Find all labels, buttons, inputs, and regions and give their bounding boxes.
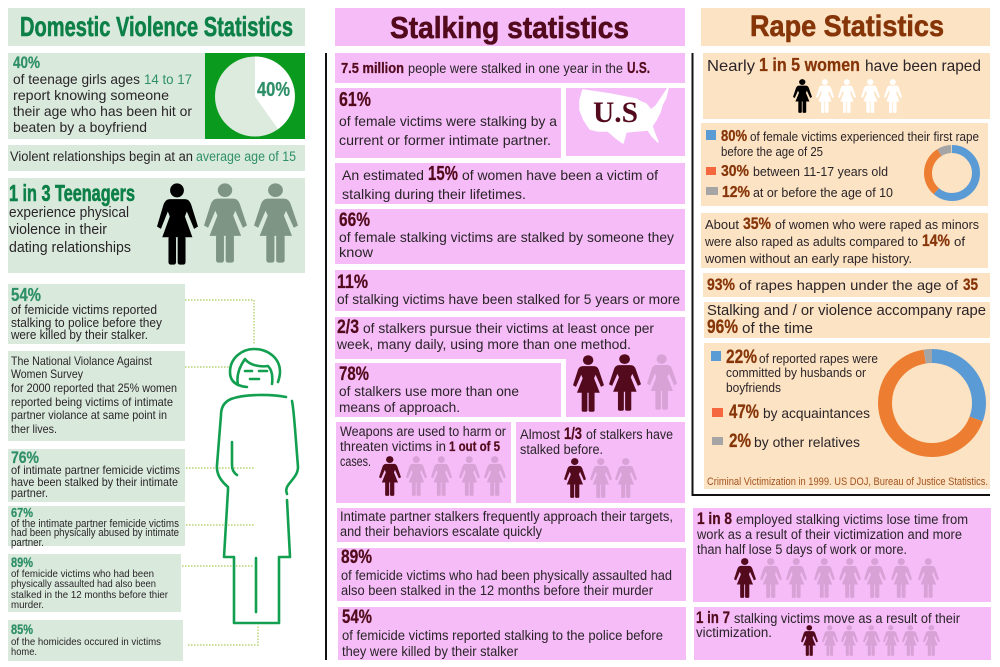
- panel: 35 percent minors: of: [954, 234, 965, 249]
- divider: left rule of stalking column: [325, 53, 327, 660]
- legend: 47 percent: [712, 402, 870, 423]
- panel: 1 in 3 teenagers: dating relationships: [9, 240, 131, 256]
- panel: 93 percent under 35: 93%: [707, 275, 735, 294]
- legend: 30 percent: [706, 163, 888, 180]
- legend: 30 percent: between 11-17 years old: [753, 165, 888, 179]
- panel: 89 percent assaulted: [337, 547, 686, 601]
- panel: 35 percent minors: women without an early rape history.: [704, 251, 912, 266]
- panel: violent relationships average age: Violent relationships begin at an: [10, 149, 193, 164]
- panel: 85 percent: 85%: [11, 621, 33, 637]
- panel: violent relationships average age: average age of 15: [196, 149, 296, 164]
- panel: 67 percent: had been physically abused by intimate: [11, 527, 179, 539]
- panel: 54 percent femicide victims: 54%: [11, 285, 41, 305]
- panel: 40 percent of teenage girls: 14 to 17: [144, 71, 192, 87]
- panel: weapons 1 out of 5: cases.: [340, 454, 371, 469]
- panel: 54 percent reported stalking: of femicide victims reported stalking to the police before: [342, 627, 663, 643]
- panel: 1 in 7 move: 1 in 7: [696, 608, 730, 627]
- panel: domestic violence title: [8, 8, 305, 46]
- panel: 76 percent: have been stalked by their intimate: [11, 475, 178, 489]
- chart: 40 percent pie: [205, 53, 305, 139]
- panel: 1 in 3 teenagers: [8, 178, 305, 273]
- panel: 54 percent reported stalking: they were killed by their stalker: [342, 643, 518, 659]
- panel: stalking and violence 96 percent: Stalking and / or violence accompany rape: [707, 302, 986, 319]
- panel: national survey: partner violance at same point in: [11, 408, 167, 422]
- panel: almost 1/3 of stalkers: Almost: [520, 427, 560, 442]
- panel: 54 percent reported stalking: 54%: [342, 607, 372, 628]
- panel: 35 percent minors: 35%: [743, 214, 771, 233]
- panel: 1 in 8 employed victims: work as a result of their victimization and more: [696, 527, 962, 542]
- panel: 7.5 million: 7.5 million: [341, 60, 404, 77]
- icon: five women, one highlighted: [793, 79, 902, 113]
- panel: 78 percent: of stalkers use more than one: [339, 383, 519, 399]
- legend: 22 percent: of reported rapes were: [759, 351, 878, 366]
- panel: 1 in 3 teenagers: violence in their: [9, 222, 107, 238]
- panel: intimate partner stalkers: and their behaviors escalate quickly: [340, 524, 542, 539]
- icon: US map: [566, 88, 685, 156]
- panel: almost 1/3 of stalkers: of stalkers have: [586, 427, 673, 442]
- chart: 40 percent pie: 40%: [257, 79, 290, 101]
- panel: 67 percent: of the intimate partner femicide victims: [11, 518, 179, 530]
- icon: three women, one highlighted: [157, 183, 298, 265]
- panel: 40 percent of teenage girls: 40%: [13, 53, 40, 72]
- icon: three women, one highlighted: [564, 458, 637, 498]
- legend: 22 percent: [711, 347, 878, 395]
- panel: 2/3 of stalkers: 2/3: [337, 317, 359, 338]
- panel: 1 in 7 move: [694, 607, 991, 660]
- panel: 89 percent: physically assaulted had also been: [11, 578, 156, 590]
- panel: 54 percent reported stalking: [338, 607, 686, 660]
- panel: rape title: Rape Statistics: [750, 10, 944, 43]
- panel: 35 percent minors: [701, 213, 988, 268]
- panel: 11 percent: of stalking victims have been stalked for 5 years or more: [337, 291, 680, 307]
- panel: 93 percent under 35: [703, 273, 990, 297]
- panel: national survey: ther lives.: [11, 422, 57, 436]
- legend: 80 percent: of female victims experienced their first rape: [750, 130, 979, 144]
- panel: 11 percent: [335, 270, 685, 311]
- panel: 54 percent femicide victims: [8, 284, 185, 344]
- panel: 89 percent: murder.: [11, 599, 44, 611]
- panel: 66 percent: know: [339, 244, 374, 260]
- panel: intimate partner stalkers: Intimate partner stalkers frequently approach their targets,: [340, 509, 673, 524]
- panel: 76 percent: 76%: [11, 448, 39, 467]
- chart: large donut: [885, 356, 979, 450]
- panel: 76 percent: of intimate partner femicide victims: [11, 463, 180, 477]
- icon: seven women, one highlighted: [801, 625, 940, 656]
- leader lines from panels to the figure: [182, 300, 258, 645]
- panel: nearly 1 in 5 women: 1 in 5 women: [759, 55, 860, 75]
- panel: 89 percent assaulted: of femicide victims who had been physically assaulted had: [341, 567, 672, 583]
- panel: 76 percent: partner.: [11, 486, 48, 500]
- panel: 66 percent: of female stalking victims are stalked by someone they: [339, 229, 674, 245]
- panel: nearly 1 in 5 women: [703, 53, 990, 119]
- icon: three women, two highlighted: [566, 354, 685, 417]
- panel: 66 percent: 66%: [339, 210, 370, 231]
- panel: 1 in 8 employed victims: employed stalking victims lose time from: [736, 512, 968, 527]
- panel: 78 percent: means of approach.: [339, 399, 460, 415]
- panel: 89 percent assaulted: 89%: [341, 547, 372, 568]
- panel: 2/3 of stalkers: [335, 317, 685, 359]
- panel: 89 percent assaulted: also been stalked in the 12 months before their murder: [341, 582, 653, 598]
- legend: 80 percent: before the age of 25: [721, 145, 823, 159]
- icon: US map: U.S: [593, 96, 638, 129]
- panel: weapons 1 out of 5: Weapons are used to harm or: [340, 424, 506, 439]
- panel: national survey: Women Survey: [11, 367, 83, 381]
- panel: 7.5 million: people were stalked in one year in the: [408, 61, 623, 76]
- panel: 1 in 7 move: victimization.: [696, 625, 772, 640]
- panel: 35 percent minors: of women who were raped as minors: [775, 217, 979, 232]
- panel: 15 percent: stalking during their lifetimes.: [342, 186, 526, 202]
- panel: 61 percent: of female victims were stalking by a: [339, 113, 557, 129]
- legend: 12 percent: at or before the age of 10: [753, 186, 893, 200]
- panel: who commits rape with donut: [704, 343, 990, 489]
- legend: 12 percent: 12%: [722, 184, 750, 201]
- panel: 67 percent: partner.: [11, 537, 44, 549]
- panel: 61 percent: current or former intimate partner.: [339, 132, 551, 148]
- legend: 30 percent: 30%: [721, 163, 749, 180]
- legend: 47 percent: 47%: [729, 402, 759, 423]
- panel: 1 in 3 teenagers: 1 in 3 Teenagers: [9, 180, 135, 206]
- panel: domestic violence title: Domestic Violence Statistics: [20, 11, 293, 42]
- panel: stalking and violence 96 percent: [704, 302, 990, 338]
- panel: 54 percent femicide victims: stalking to police before they: [11, 316, 163, 330]
- panel: 89 percent: [8, 554, 181, 612]
- panel: 89 percent: 89%: [11, 554, 33, 570]
- icon: five women, one highlighted: [379, 456, 506, 496]
- panel: 35 percent minors: were also raped as adults compared to: [704, 234, 918, 249]
- panel: 40 percent of teenage girls: [8, 53, 205, 139]
- panel: rape title: [701, 8, 990, 46]
- panel: stalking and violence 96 percent: of the time: [742, 320, 813, 337]
- panel: 66 percent: [335, 209, 685, 264]
- icon: green outline woman figure: [217, 349, 298, 623]
- legend: 2 percent: [712, 431, 860, 452]
- panel: 1 in 7 move: stalking victims move as a result of their: [734, 611, 960, 626]
- panel: 15 percent: of women have been a victim of: [462, 167, 658, 183]
- panel: stalking title: Stalking statistics: [390, 10, 629, 45]
- panel: stalking and violence 96 percent: 96%: [707, 317, 738, 338]
- panel: 89 percent: stalked in the 12 months before thier: [11, 589, 168, 601]
- panel: 85 percent: home.: [11, 646, 37, 658]
- legend: 2 percent: by other relatives: [754, 434, 860, 450]
- panel: 15 percent: [335, 163, 685, 204]
- panel: 7.5 million: [335, 53, 685, 83]
- legend: 80 percent: 80%: [721, 128, 747, 145]
- panel: 2/3 of stalkers: of stalkers pursue their victims at least once per: [363, 320, 654, 336]
- panel: 85 percent: of the homicides occured in victims: [11, 636, 161, 648]
- legend: 22 percent: boyfriends: [726, 380, 781, 395]
- panel: 35 percent minors: 14%: [922, 231, 950, 250]
- panel: 85 percent: [8, 620, 183, 661]
- chart: small donut: [928, 149, 976, 197]
- frame: rape column rule: [692, 53, 990, 495]
- panel: 61 percent: [335, 88, 561, 158]
- panel: 1 in 8 employed victims: than half lose 5 days of work or more.: [697, 542, 907, 557]
- panel: 15 percent: An estimated: [342, 167, 424, 183]
- panel: almost 1/3 of stalkers: [516, 422, 685, 503]
- panel: nearly 1 in 5 women: have been raped: [865, 58, 981, 75]
- panel: 61 percent: 61%: [339, 89, 371, 111]
- panel: 78 percent: 78%: [339, 364, 369, 385]
- panel: 67 percent: 67%: [11, 505, 33, 520]
- panel: 35 percent minors: About: [705, 217, 739, 232]
- panel: weapons 1 out of 5: [336, 422, 511, 503]
- legend: 22 percent: 22%: [726, 347, 757, 368]
- panel: almost 1/3 of stalkers: 1/3: [564, 424, 582, 443]
- panel: 93 percent under 35: 35: [963, 275, 978, 294]
- panel: nearly 1 in 5 women: Nearly: [707, 58, 755, 75]
- panel: 7.5 million: U.S.: [627, 60, 650, 77]
- legend: 2 percent: 2%: [729, 431, 751, 452]
- panel: violent relationships average age: [8, 145, 305, 171]
- panel: 78 percent: [335, 363, 561, 417]
- panel: national survey: The National Violance Against: [11, 354, 153, 368]
- panel: 93 percent under 35: of rapes happen under the age of: [739, 277, 958, 293]
- panel: 1 in 8 employed victims: [693, 508, 991, 602]
- panel: national survey: [8, 351, 185, 441]
- panel: 40 percent of teenage girls: beaten by a boyfriend: [13, 119, 147, 135]
- panel: 1 in 8 employed victims: 1 in 8: [697, 509, 732, 528]
- panel: 11 percent: 11%: [337, 272, 368, 293]
- panel: 40 percent of teenage girls: their age who has been hit or: [13, 103, 192, 119]
- panel: weapons 1 out of 5: 1 out of 5: [449, 438, 500, 454]
- legend: 12 percent: [706, 184, 893, 201]
- panel: 40 percent of teenage girls: report knowing someone: [13, 87, 169, 103]
- panel: 15 percent: 15%: [428, 163, 458, 185]
- icon: eight women, one highlighted: [734, 558, 939, 598]
- panel: almost 1/3 of stalkers: stalked before.: [520, 442, 603, 457]
- legend: 80 percent: [706, 128, 979, 159]
- panel: 67 percent: [8, 505, 185, 549]
- panel: 40 percent of teenage girls: of teenage girls ages: [13, 71, 140, 87]
- legend: 22 percent: committed by husbands or: [726, 365, 867, 380]
- panel: 54 percent femicide victims: of femicide victims reported: [11, 303, 157, 317]
- panel: first rape ages with donut: [701, 123, 988, 206]
- panel: national survey: reported being victims of intimate: [11, 395, 173, 409]
- panel: 1 in 3 teenagers: experience physical: [9, 205, 129, 221]
- panel: 2/3 of stalkers: week, many daily, using more than one method.: [336, 336, 631, 352]
- panel: national survey: for 2000 reported that 25% women: [11, 381, 177, 395]
- panel: stalking title: [335, 8, 685, 46]
- panel: 54 percent femicide victims: were killed by their stalker.: [10, 328, 148, 342]
- legend: 47 percent: by acquaintances: [763, 405, 870, 421]
- panel: 89 percent: of femicide victims who had been: [11, 568, 154, 580]
- panel: intimate partner stalkers: [337, 508, 685, 542]
- panel: weapons 1 out of 5: threaten victims in: [340, 439, 446, 454]
- panel: 76 percent: [8, 448, 185, 502]
